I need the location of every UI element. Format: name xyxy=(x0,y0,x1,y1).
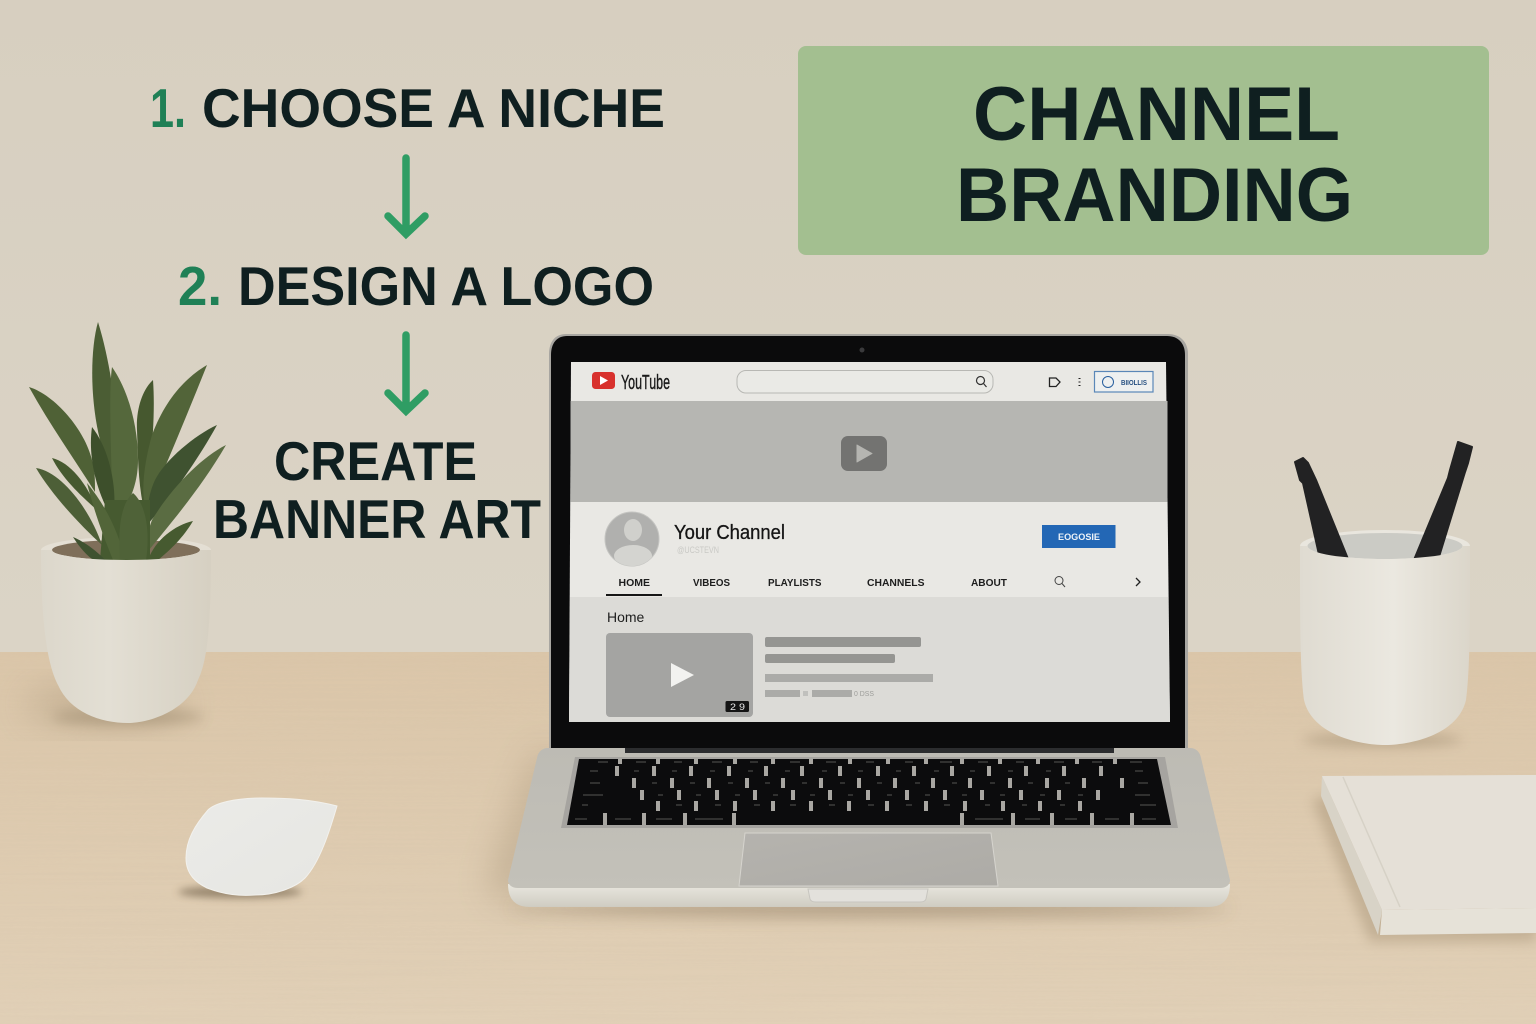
step 3: create banner art: CREATE xyxy=(274,430,477,492)
plant in pot xyxy=(25,322,226,725)
search bar xyxy=(737,370,993,393)
panel: channel branding title xyxy=(798,46,1489,255)
channel tabs: PLAYLISTS xyxy=(768,578,822,589)
sign-in button xyxy=(1094,372,1153,392)
laptop xyxy=(490,334,1230,914)
pot body xyxy=(41,550,211,723)
keyboard xyxy=(561,757,1178,828)
step 1: choose a niche: 1. xyxy=(150,77,186,139)
cup body xyxy=(1300,546,1470,745)
channel banner xyxy=(570,401,1168,502)
step 3: create banner art: BANNER ART xyxy=(213,488,541,550)
front notch xyxy=(808,889,928,902)
step 2: design a logo: 2. xyxy=(178,255,222,317)
home section label: Home xyxy=(607,609,645,625)
pen holder xyxy=(1295,442,1472,747)
channel tabs: HOME xyxy=(618,578,650,589)
video text placeholders xyxy=(765,637,933,698)
sign-in button: BIIOLLIS xyxy=(1121,380,1147,387)
laptop lid xyxy=(549,334,1188,748)
heading: channel branding: BRANDING xyxy=(956,153,1353,238)
customise button xyxy=(1042,525,1116,548)
channel name: Your Channel xyxy=(674,522,785,544)
step 3: create banner art xyxy=(213,430,541,550)
arrow: step 1 to step 2 xyxy=(388,158,425,234)
video text placeholders: 0 DSS xyxy=(854,689,874,698)
heading: channel branding: CHANNEL xyxy=(973,72,1340,157)
channel tabs: CHANNELS xyxy=(867,578,925,589)
plant leaves xyxy=(29,322,226,561)
customise button: EOGOSIE xyxy=(1058,532,1100,543)
step 1: choose a niche: CHOOSE A NICHE xyxy=(202,77,665,139)
channel handle: @UCSTEVN xyxy=(677,545,719,555)
youtube logo xyxy=(592,372,670,394)
video thumbnail xyxy=(606,633,753,717)
youtube logo: YouTube xyxy=(621,372,670,394)
hinge xyxy=(625,742,1114,753)
video thumbnail: 2 9 xyxy=(730,702,745,712)
pens xyxy=(1295,442,1472,560)
header icons xyxy=(1050,378,1080,386)
screen: youtube channel page xyxy=(569,362,1170,722)
step 2: design a logo: DESIGN A LOGO xyxy=(238,255,654,317)
wall background xyxy=(0,0,1536,653)
trackpad xyxy=(739,833,998,886)
laptop base xyxy=(508,742,1230,907)
channel tabs: ABOUT xyxy=(971,578,1007,589)
heading: channel branding xyxy=(956,72,1353,238)
channel tabs: VIBEOS xyxy=(693,578,730,589)
desk surface xyxy=(0,652,1536,1024)
channel tabs xyxy=(606,576,1140,596)
content area background xyxy=(569,597,1170,722)
channel avatar xyxy=(605,512,659,567)
mouse xyxy=(178,798,337,898)
notebook xyxy=(1312,775,1536,942)
arrow: step 2 to step 3 xyxy=(388,335,425,411)
